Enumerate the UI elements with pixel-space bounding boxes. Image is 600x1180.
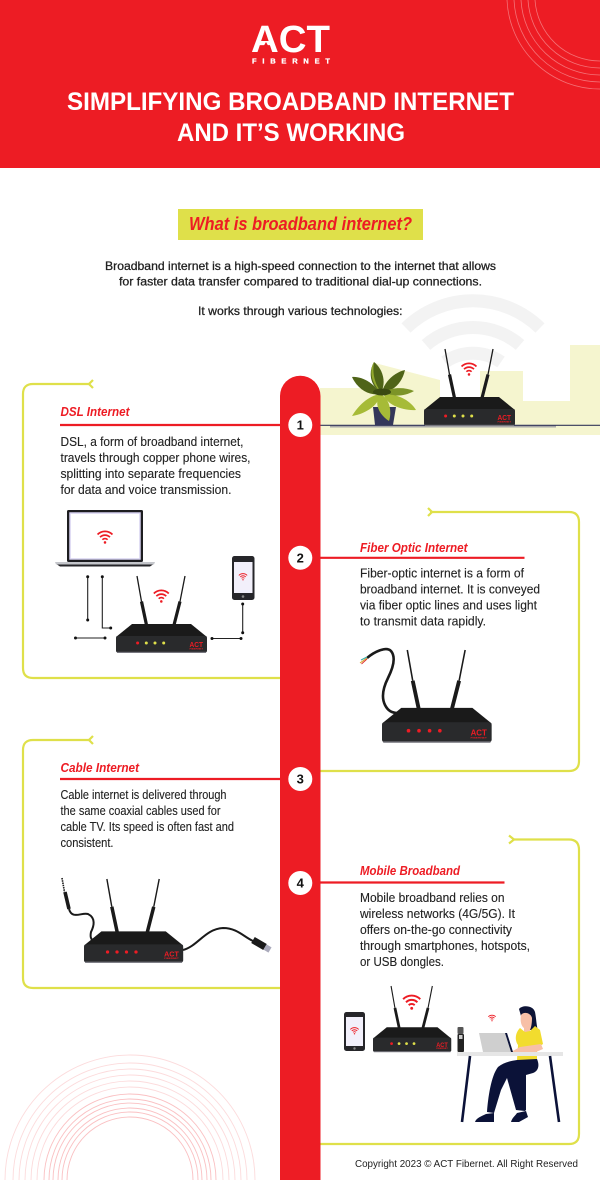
router: ACT — [436, 1043, 448, 1049]
legs — [487, 1059, 538, 1113]
router: ACT — [164, 949, 179, 958]
step number 2 — [288, 546, 312, 570]
router: ACT — [471, 728, 488, 738]
router with wifi: FIBERNET — [498, 422, 513, 424]
heading: DSL: DSL Internet — [60, 405, 130, 419]
text: fiber body: broadband internet. It is conveyed — [360, 582, 540, 597]
heading: mobile: Mobile Broadband — [360, 864, 460, 878]
text: fiber body — [360, 566, 540, 629]
fiber cable — [360, 649, 398, 713]
text: DSL body: DSL, a form of broadband internet, — [60, 434, 244, 449]
text: fiber body: Fiber-optic internet is a form of — [360, 566, 524, 581]
router: FIBERNET — [190, 648, 205, 650]
intro text — [105, 259, 496, 318]
router: ACT — [190, 642, 204, 649]
icon: phone — [232, 556, 254, 600]
text: fiber body: to transmit data rapidly. — [360, 614, 486, 629]
router — [116, 576, 207, 653]
text: cable body: Cable internet is delivered through — [60, 787, 226, 802]
text: cable body: consistent. — [60, 835, 114, 850]
router with wifi — [424, 349, 515, 426]
icon: phone — [344, 1012, 365, 1051]
intro text: It works through various technologies: — [198, 304, 402, 318]
text: DSL body — [60, 434, 250, 497]
text: fiber body: via fiber optic lines and uses light — [360, 598, 537, 613]
text: DSL body: splitting into separate frequencies — [60, 466, 241, 481]
router: FIBERNET — [436, 1048, 448, 1050]
heading rule lines — [60, 425, 524, 882]
bottom decorative arcs — [5, 1055, 255, 1180]
pale building backdrop — [320, 345, 600, 435]
text: mobile body: Mobile broadband relies on — [360, 890, 504, 905]
title: AND IT’S WORKING — [177, 119, 405, 147]
heading: what is broadband internet — [178, 209, 423, 240]
router — [373, 986, 451, 1052]
router — [84, 879, 183, 963]
central red timeline — [280, 376, 320, 1180]
illustration: woman at desk — [457, 1006, 563, 1122]
icon: laptop — [55, 510, 155, 566]
step number 3 — [288, 767, 312, 791]
logo: ACT Fibernet: ACT — [251, 19, 330, 61]
header corner arcs — [507, 0, 600, 89]
plant — [352, 362, 416, 425]
arm — [511, 1044, 543, 1052]
panel: cable internet — [60, 761, 270, 963]
big wifi watermark — [406, 301, 540, 362]
heading: fiber: Fiber Optic Internet — [360, 541, 468, 555]
text: cable body — [60, 787, 234, 850]
hero illustration: shelf with plant and router — [320, 301, 600, 435]
intro text: Broadband internet is a high-speed connection to the internet that allows — [105, 259, 496, 273]
heading: cable: Cable Internet — [60, 761, 140, 775]
router — [382, 650, 492, 743]
torso — [516, 1026, 543, 1060]
panel outlines — [23, 380, 579, 1144]
step number 3: 3 — [297, 772, 304, 786]
panel: DSL internet — [55, 405, 254, 653]
intro text: for faster data transfer compared to traditional dial-up connections. — [119, 274, 482, 288]
text: DSL body: travels through copper phone wires, — [60, 450, 250, 465]
text: mobile body: or USB dongles. — [360, 954, 444, 969]
router: FIBERNET — [471, 738, 488, 740]
heading: what is broadband internet: What is broadband internet? — [189, 214, 412, 234]
text: cable body: the same coaxial cables used for — [60, 803, 221, 818]
copyright: Copyright 2023 © ACT Fibernet. All Right Reserved — [355, 1159, 578, 1170]
icon: USB dongle — [458, 1027, 464, 1052]
router with wifi: ACT — [498, 415, 512, 422]
step number 2: 2 — [297, 550, 304, 565]
text: mobile body — [359, 890, 530, 969]
panel: fiber optic internet — [360, 541, 540, 743]
text: cable body: cable TV. Its speed is often fast and — [60, 819, 234, 834]
laptop — [479, 1033, 511, 1052]
shoes — [475, 1113, 494, 1122]
text: DSL body: for data and voice transmission. — [60, 482, 232, 497]
title: SIMPLIFYING BROADBAND INTERNET — [67, 88, 514, 116]
title — [67, 88, 514, 147]
step number 4: 4 — [297, 876, 305, 890]
panel: mobile broadband — [344, 864, 563, 1122]
text: mobile body: through smartphones, hotspots, — [360, 938, 530, 953]
step number 1: 1 — [297, 418, 304, 432]
face — [521, 1013, 532, 1034]
hair — [519, 1006, 541, 1043]
cables and plugs — [62, 878, 270, 950]
text: mobile body: offers on-the-go connectivity — [360, 922, 512, 937]
router: FIBERNET — [164, 958, 180, 960]
desk — [457, 1052, 563, 1056]
step number 1 — [288, 413, 312, 437]
connection lines — [74, 575, 244, 640]
shelf — [330, 426, 556, 428]
header band — [0, 0, 600, 168]
logo: ACT Fibernet: FIBERNET — [252, 56, 330, 66]
text: mobile body: wireless networks (4G/5G). It — [359, 906, 515, 921]
step number 4 — [288, 871, 312, 895]
